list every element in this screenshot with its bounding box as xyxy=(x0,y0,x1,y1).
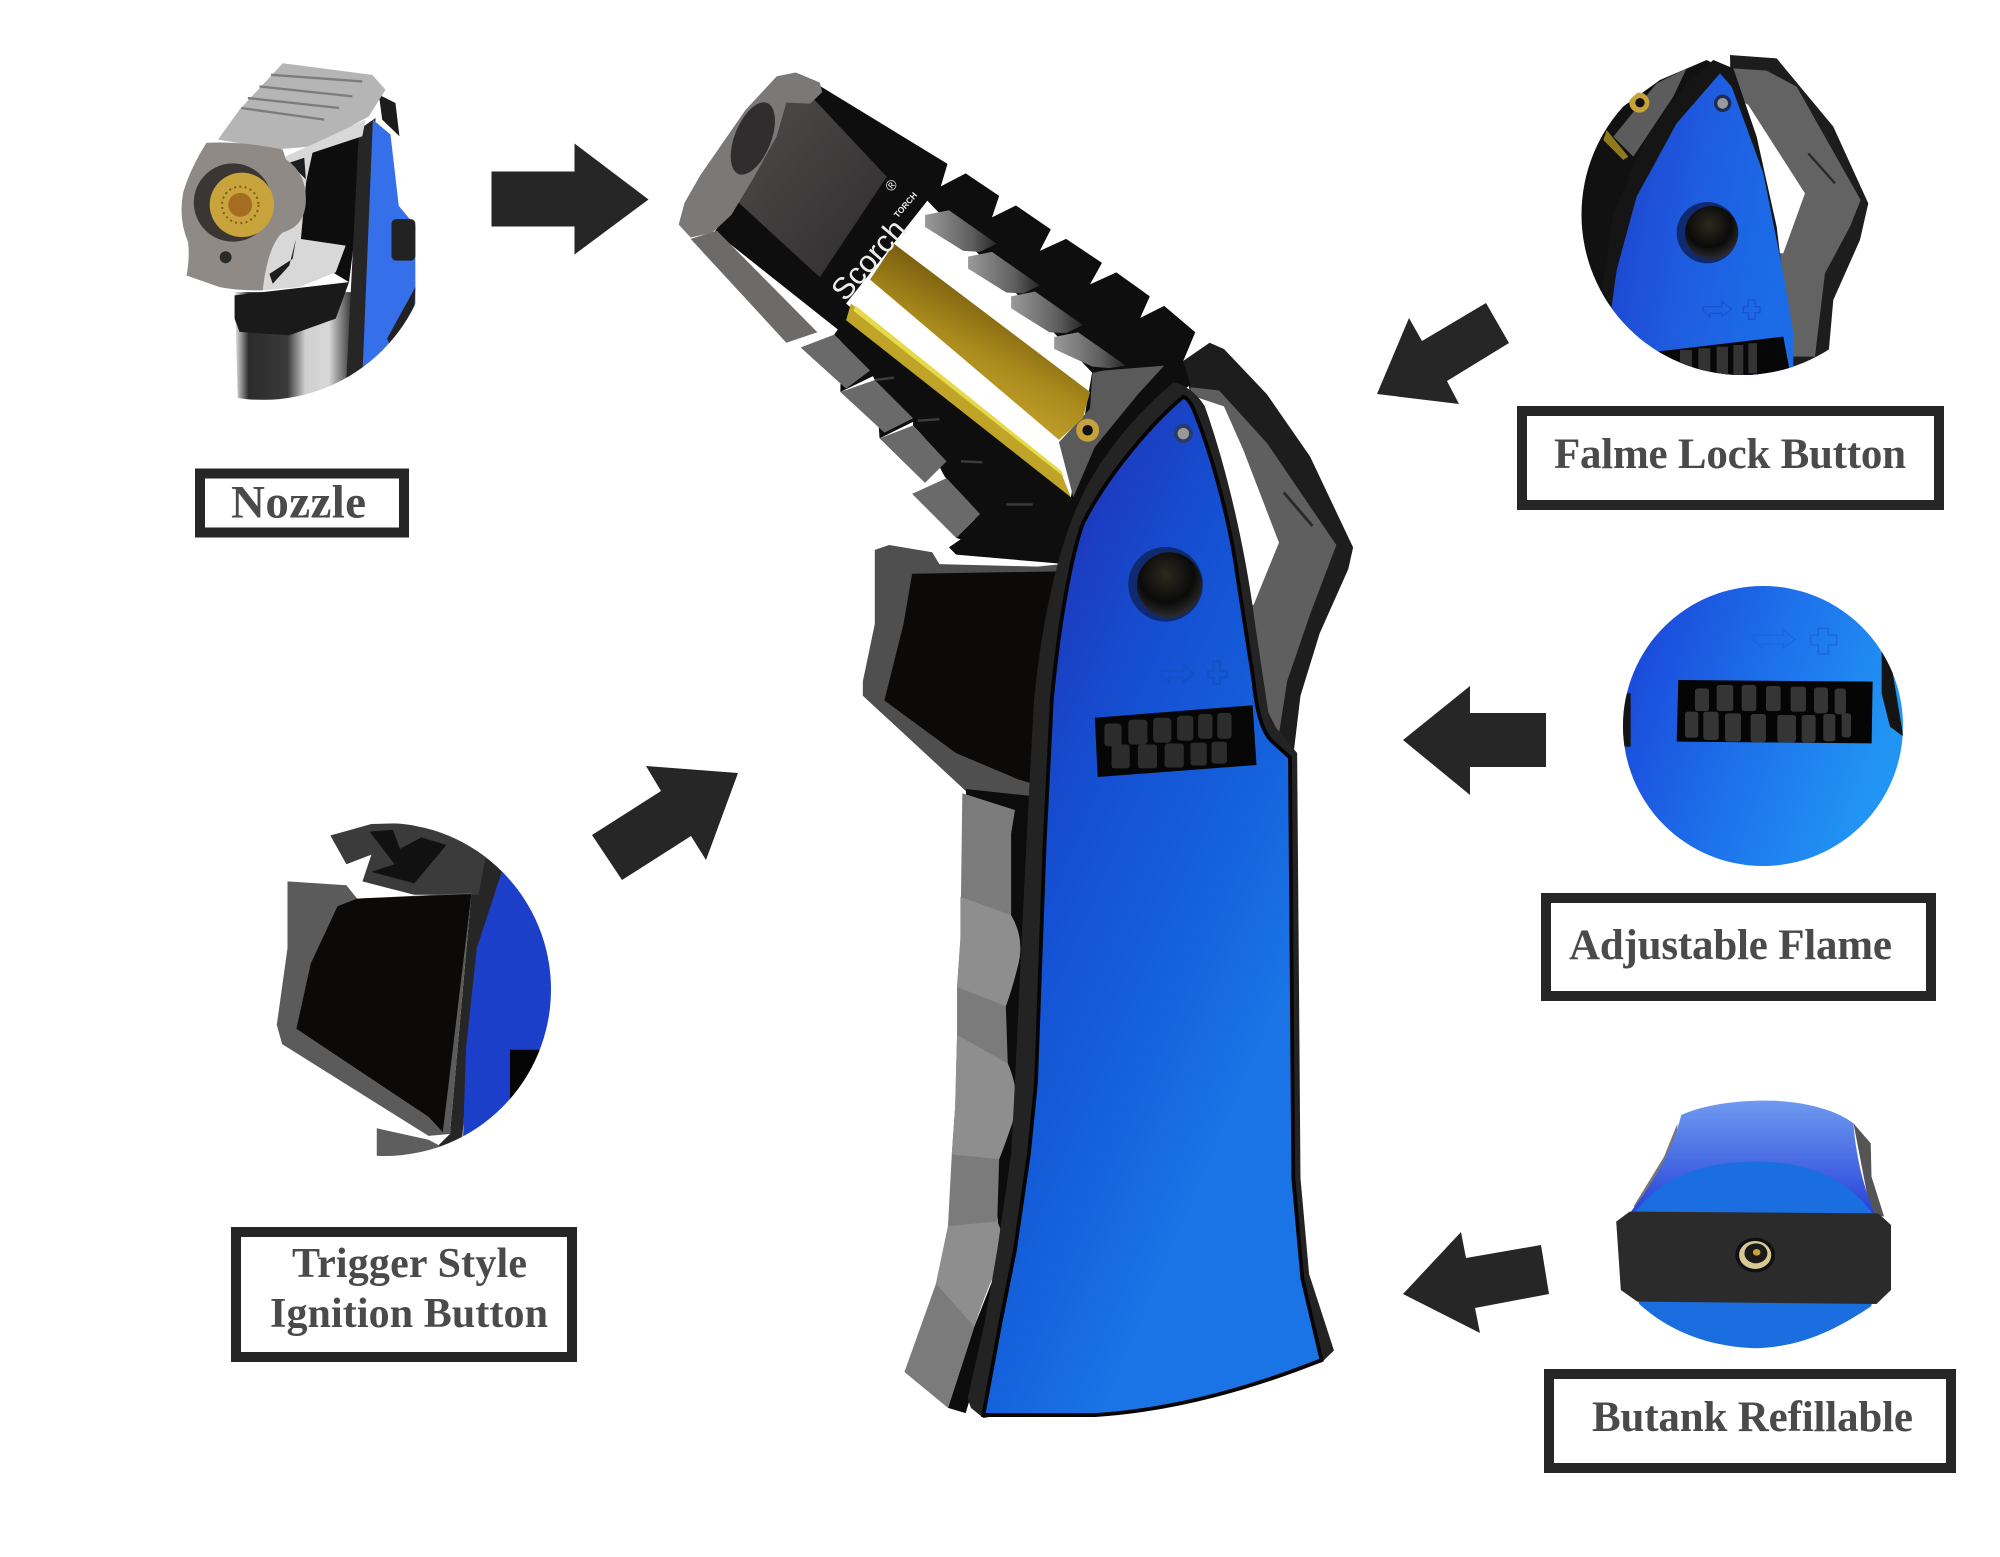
trigger xyxy=(277,881,471,1136)
label: Falme Lock Button: Falme Lock Button xyxy=(1554,431,1906,478)
brand text: Scorch: Scorch xyxy=(825,213,913,307)
label: Adjustable Flame xyxy=(1546,898,1931,996)
label: Butank Refillable xyxy=(1549,1374,1951,1468)
icon: engraved arrow and plus xyxy=(1703,300,1760,319)
arrow: adjustable flame xyxy=(1403,686,1546,795)
side strips xyxy=(1853,1123,1884,1217)
label: Trigger Style Ignition Button: Ignition Button xyxy=(270,1291,548,1337)
arrow: flame lock xyxy=(1377,303,1509,404)
arrow: butane refill xyxy=(1403,1232,1549,1333)
panel: flame lock button detail xyxy=(1577,55,1868,390)
gold burner xyxy=(210,173,274,237)
label: Falme Lock Button xyxy=(1522,411,1939,505)
blue lower xyxy=(1637,1298,1875,1348)
icon: engraved arrow and plus xyxy=(1753,628,1837,654)
torch head frame xyxy=(691,86,1195,564)
icon: panel screw xyxy=(1174,424,1193,443)
icon: engraved arrow and plus xyxy=(1159,661,1227,684)
panel: trigger detail xyxy=(277,818,557,1159)
label: Adjustable Flame: Adjustable Flame xyxy=(1569,922,1892,969)
black side xyxy=(300,138,359,282)
inner cooling teeth xyxy=(925,201,1126,373)
body band xyxy=(421,827,504,1148)
blue body panel xyxy=(983,397,1322,1415)
ceramic face xyxy=(182,143,306,290)
panel: butane refill valve detail xyxy=(1616,1101,1891,1348)
head teeth xyxy=(330,822,486,895)
ceramic nozzle cap xyxy=(679,72,887,277)
stem xyxy=(235,292,352,402)
label: Nozzle xyxy=(200,474,404,532)
blue panel xyxy=(1600,60,1797,390)
left body xyxy=(1582,60,1711,312)
blue panel xyxy=(463,872,551,1136)
fin ribs xyxy=(218,63,386,149)
lower cooling teeth xyxy=(801,318,1033,552)
brass tubes xyxy=(846,244,1099,497)
lower grip xyxy=(376,1128,441,1156)
label: Trigger Style Ignition Button: Trigger Style xyxy=(292,1241,527,1287)
arrow: nozzle xyxy=(492,144,648,254)
panel: adjustable flame detail xyxy=(1620,584,1906,868)
arrow: trigger xyxy=(592,766,738,880)
brand text: Scorch: ® xyxy=(882,176,902,195)
trigger xyxy=(863,545,1061,800)
flame adjuster wheel xyxy=(1095,705,1256,777)
right handle xyxy=(1181,343,1353,755)
panel: nozzle detail xyxy=(182,63,415,402)
flame lock button xyxy=(1128,547,1203,622)
brand text: Scorch: TORCH xyxy=(892,190,919,220)
label: Trigger Style Ignition Button xyxy=(236,1232,572,1357)
lock button side xyxy=(391,219,415,261)
grip xyxy=(904,789,1033,1413)
rear handle xyxy=(379,95,399,136)
body outline xyxy=(968,382,1334,1418)
brand text: Scorch xyxy=(825,176,919,307)
blue side xyxy=(362,120,415,378)
blue top xyxy=(1630,1101,1875,1213)
label: Nozzle: Nozzle xyxy=(231,476,366,528)
refill valve xyxy=(1735,1238,1775,1272)
metal plate xyxy=(1616,1212,1891,1304)
wheel window xyxy=(1677,680,1873,743)
label: Butank Refillable: Butank Refillable xyxy=(1592,1394,1913,1441)
main torch product xyxy=(679,72,1353,1418)
handle xyxy=(1730,55,1868,373)
blue dome xyxy=(1632,1162,1875,1217)
